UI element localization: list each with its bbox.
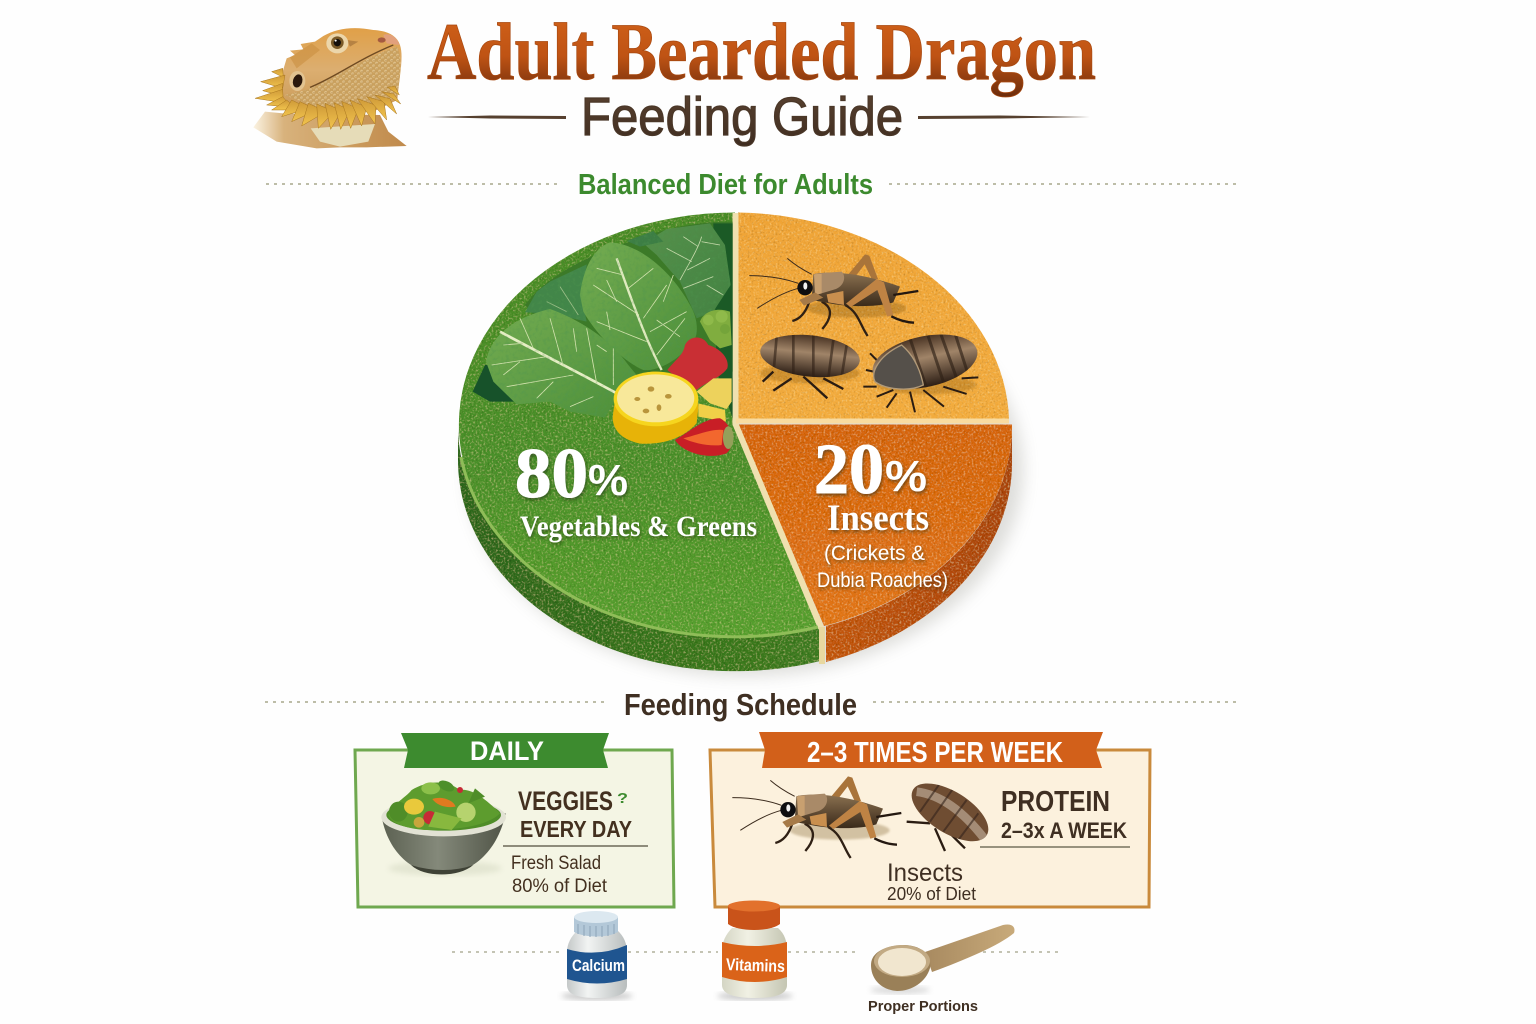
pie slice: insects [738, 424, 1012, 626]
icon: vitamins bottle: Vitamins [726, 955, 785, 976]
text: protein: Insects [887, 859, 963, 887]
text: protein [887, 786, 1130, 904]
insects illustration [749, 254, 982, 412]
icon: calcium bottle: Calcium [572, 956, 625, 975]
icon: salad bowl [381, 778, 506, 876]
subtitle: Feeding Guide [581, 87, 903, 147]
text: protein: PROTEIN [1001, 786, 1110, 818]
pie side: green [458, 424, 820, 671]
leaf centre [580, 242, 697, 370]
label: 20% insects [814, 429, 948, 592]
banner: 2-3 times per week: 2–3 TIMES PER WEEK [807, 737, 1063, 769]
label: 80% vegetables: % [588, 456, 628, 505]
subtitle [428, 87, 1090, 147]
supplements divider [452, 951, 1060, 953]
text: veggies every day: Fresh Salad [511, 853, 601, 874]
red pepper [667, 337, 728, 390]
icon: vitamins bottle [717, 900, 793, 1000]
slice dividers [461, 213, 1009, 664]
banner: daily [401, 733, 609, 768]
label: 80% vegetables: 80 [515, 435, 588, 513]
text: veggies every day: 80% of Diet [512, 876, 608, 897]
icon: measuring spoon [870, 924, 1015, 994]
cricket [749, 254, 918, 336]
title: Adult Bearded Dragon [427, 6, 1096, 97]
leaf back right [643, 223, 731, 318]
squash slice [613, 372, 698, 444]
banner: daily: DAILY [470, 736, 544, 766]
pie slice: vegetables [459, 212, 822, 636]
panel: 2-3 times per week [710, 732, 1150, 907]
pie slice: crickets area [738, 212, 1009, 420]
label: 20% insects: % [885, 452, 927, 501]
icon: dubia roach [906, 784, 988, 852]
yellow fruit [697, 378, 732, 409]
icon: bearded dragon [253, 28, 407, 148]
label: 20% insects: (Crickets & [824, 542, 925, 565]
leaf back left [525, 231, 663, 322]
dubia roach right [863, 334, 978, 412]
label: 80% vegetables: Vegetables & Greens [520, 510, 757, 543]
broccoli [700, 310, 732, 348]
text: veggies every day: VEGGIES [518, 786, 613, 816]
text: veggies every day: ? [617, 790, 628, 807]
red fruit [675, 418, 732, 456]
label: 80% vegetables [515, 435, 757, 543]
text: protein: 2–3x A WEEK [1001, 818, 1127, 843]
leaf front [486, 309, 637, 418]
label: 20% insects: Dubia Roaches) [817, 569, 948, 592]
text: protein: 20% of Diet [887, 884, 976, 904]
label: 20% insects: 20 [814, 429, 884, 509]
pie side: orange [826, 424, 1012, 662]
panel: daily [355, 733, 674, 907]
text: veggies every day: EVERY DAY [520, 816, 632, 842]
heading: feeding schedule: Feeding Schedule [624, 687, 857, 722]
icon: calcium bottle [561, 911, 633, 1000]
dubia roach left [758, 330, 862, 398]
label: 20% insects: Insects [827, 498, 929, 539]
heading: balanced diet: Balanced Diet for Adults [578, 169, 873, 201]
icon: cricket [732, 776, 901, 858]
pie chart [458, 212, 1023, 676]
vegetables illustration [473, 222, 734, 456]
text: veggies every day [503, 786, 648, 897]
caption: proper portions: Proper Portions [868, 998, 978, 1015]
